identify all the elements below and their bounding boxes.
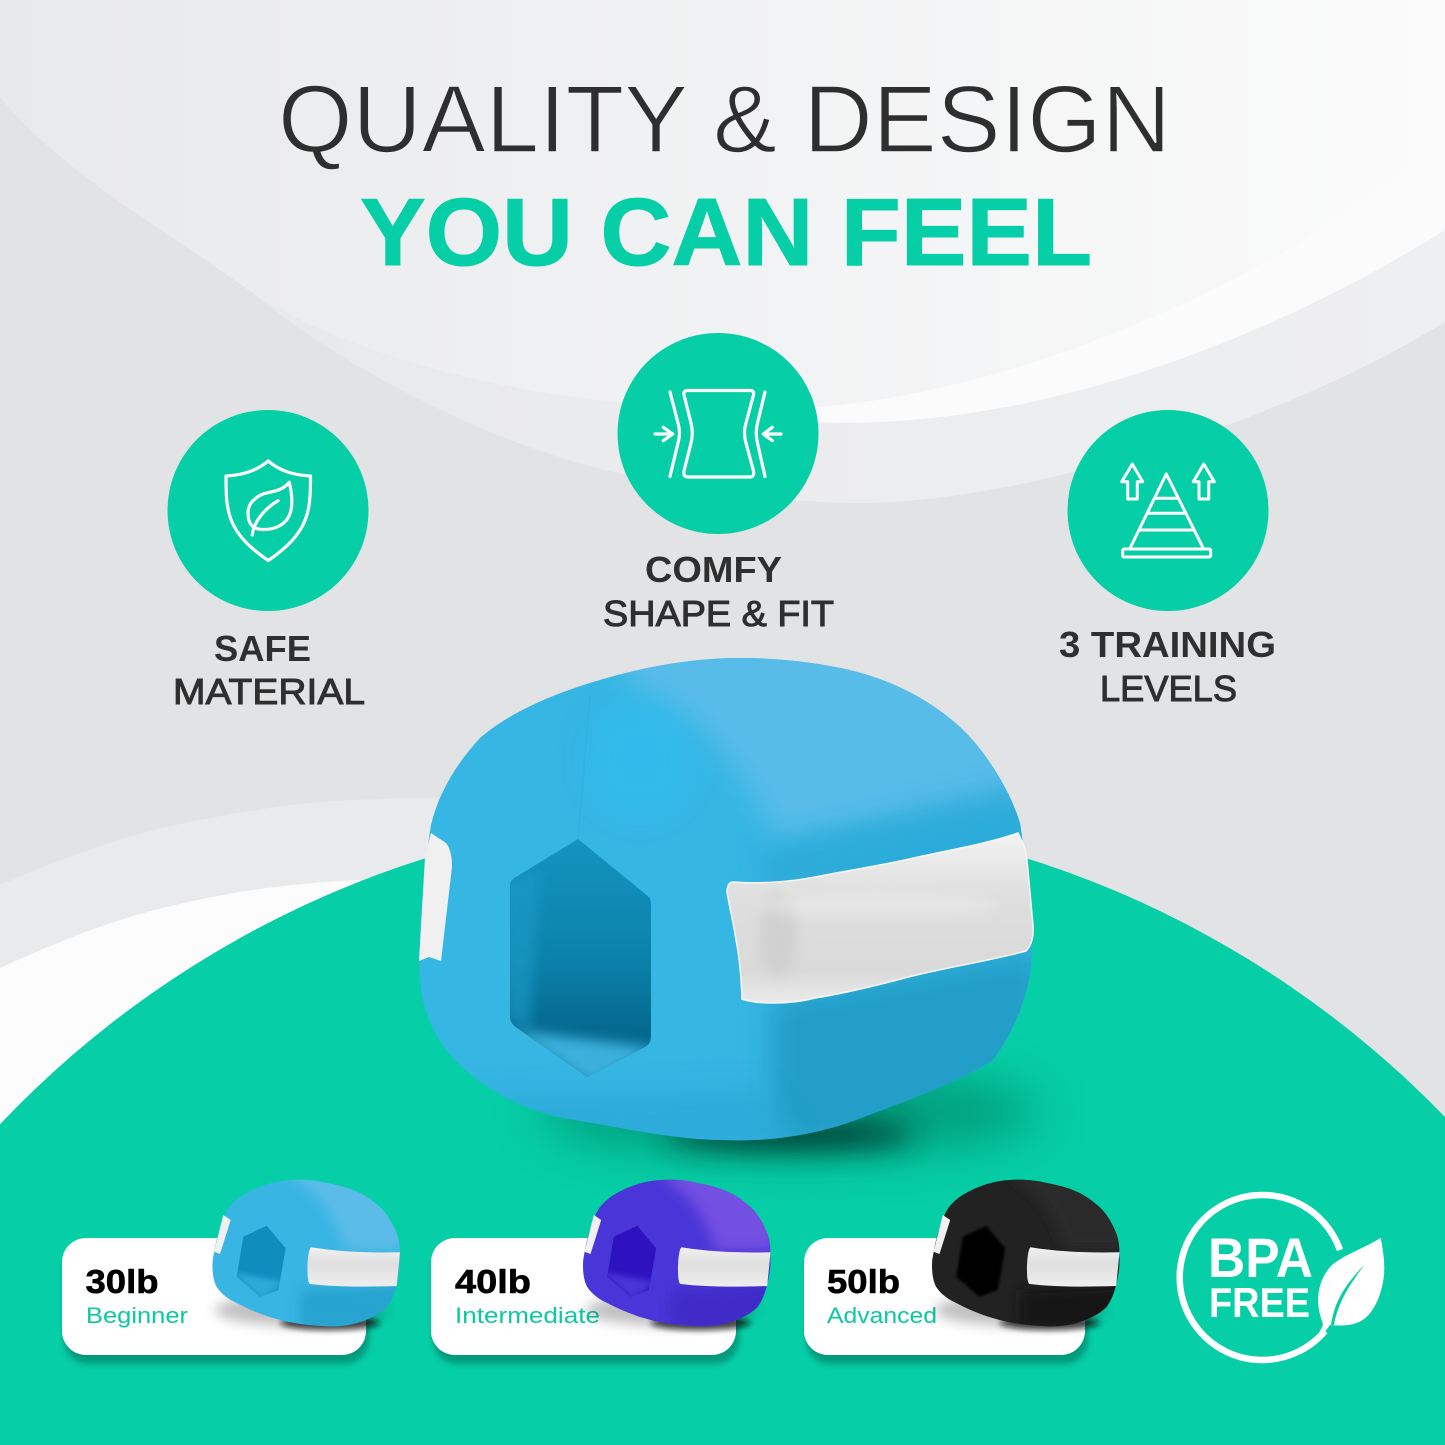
translucent strap [727, 833, 1033, 1003]
card panel [804, 1238, 1085, 1355]
mini product: black [932, 1180, 1120, 1326]
seam [578, 695, 590, 839]
hole [956, 1226, 1005, 1297]
level label: Advanced [827, 1303, 937, 1328]
background lower-left white swoosh [0, 880, 360, 1140]
badge text: FREE [1209, 1279, 1310, 1326]
icon circle: training levels [1068, 410, 1268, 611]
level label: Beginner [86, 1303, 188, 1328]
icon: waisted block with arrows [655, 390, 781, 477]
title line 2: YOU CAN FEEL [360, 179, 1092, 286]
hexagonal hole [510, 839, 651, 1077]
top highlight [616, 658, 1014, 841]
icon circle: comfy shape [618, 333, 818, 534]
ball body [410, 640, 1050, 1150]
badge text: BPA [1208, 1226, 1313, 1289]
product shadow [586, 1294, 756, 1330]
mid right shading [768, 778, 1023, 881]
title line 1: QUALITY & DESIGN [278, 66, 1171, 173]
feature: comfy shape and fit [603, 333, 834, 634]
product shadow [215, 1294, 385, 1330]
label: safe material: SAFE [214, 628, 311, 669]
weight label: 30lb [86, 1263, 158, 1300]
background top layer [0, 0, 1445, 409]
hole [236, 1226, 286, 1297]
icon: cone with up arrows [1122, 464, 1214, 557]
lower right shading [770, 950, 1040, 1145]
feature: 3 training levels [1059, 410, 1276, 709]
label: 3 training levels [1059, 624, 1276, 709]
card panel [62, 1238, 366, 1355]
green dome [0, 812, 1445, 1445]
background curved band [0, 0, 1445, 503]
hole floor [517, 1026, 650, 1077]
label: 3 training levels: 3 TRAINING [1059, 624, 1276, 665]
product shadow [934, 1294, 1104, 1330]
level label: Intermediate [455, 1303, 600, 1328]
mini product: blue [212, 1180, 400, 1326]
bright cyan spot [604, 698, 683, 800]
label: 3 training levels: LEVELS [1100, 668, 1237, 709]
label: comfy shape and fit: SHAPE & FIT [603, 593, 834, 634]
ground shadow [540, 1070, 1040, 1154]
title [278, 66, 1171, 286]
weight label: 50lb [827, 1263, 900, 1300]
feature: safe material [168, 410, 368, 712]
badge text [1208, 1226, 1313, 1326]
badge ring [1180, 1195, 1340, 1360]
label: comfy shape and fit [603, 549, 834, 634]
hole [607, 1226, 656, 1297]
badge: BPA free [1180, 1195, 1384, 1360]
card: 30lb beginner [62, 1170, 405, 1364]
label: comfy shape and fit: COMFY [645, 549, 782, 590]
bottom shading [520, 1098, 786, 1140]
card: 50lb advanced [804, 1170, 1124, 1364]
main product: blue jaw exerciser [410, 640, 1050, 1154]
background white swoosh band [815, 100, 1445, 423]
weight label: 40lb [455, 1263, 531, 1300]
background lower-left grey swoosh [0, 798, 437, 1000]
hole left wall [510, 880, 536, 1029]
icon: shield with leaf [226, 461, 310, 560]
card panel [431, 1238, 736, 1355]
card: 40lb intermediate [431, 1170, 776, 1364]
left tab [419, 833, 452, 961]
card shadow [433, 1245, 739, 1364]
label: safe material [173, 628, 365, 712]
card shadow [806, 1245, 1088, 1364]
card shadow [64, 1245, 369, 1364]
label: safe material: MATERIAL [173, 671, 365, 712]
mini product: purple [583, 1180, 770, 1326]
badge leaf [1318, 1238, 1384, 1333]
icon circle: safe material [168, 410, 368, 611]
